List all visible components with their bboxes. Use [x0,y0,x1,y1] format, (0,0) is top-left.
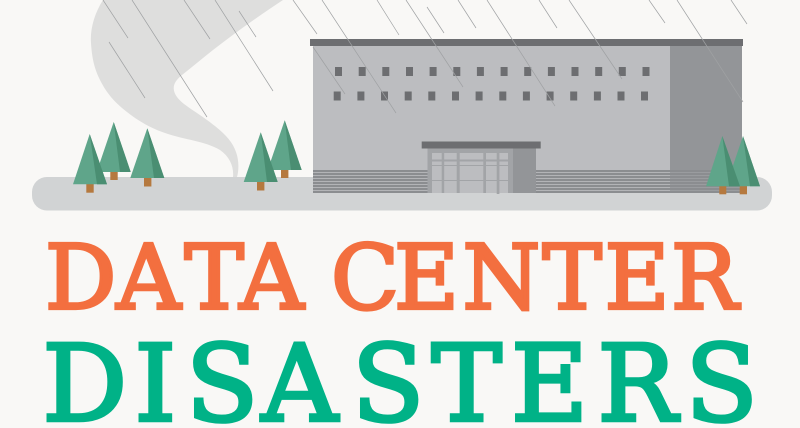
title line: data center: DATA CENTER [45,226,741,330]
tree [706,136,740,194]
tree [268,120,302,178]
tree [130,128,164,186]
roof [310,39,743,46]
entrance side panel [513,148,536,193]
building front wall [313,46,670,193]
door frame [428,148,513,193]
tree [97,122,131,180]
building side wall [670,46,742,193]
ground [32,177,772,210]
tornado [91,0,283,177]
upper row of windows [335,67,650,76]
tree [244,132,278,190]
entrance canopy [422,142,541,148]
lower row of windows [334,92,648,100]
base stripes [313,170,742,193]
glass panes [432,153,508,193]
tree [73,134,107,193]
title [42,226,758,428]
mullions [432,153,508,194]
tree [726,136,760,194]
building [310,39,743,194]
rain [103,0,747,117]
entrance [422,142,541,194]
